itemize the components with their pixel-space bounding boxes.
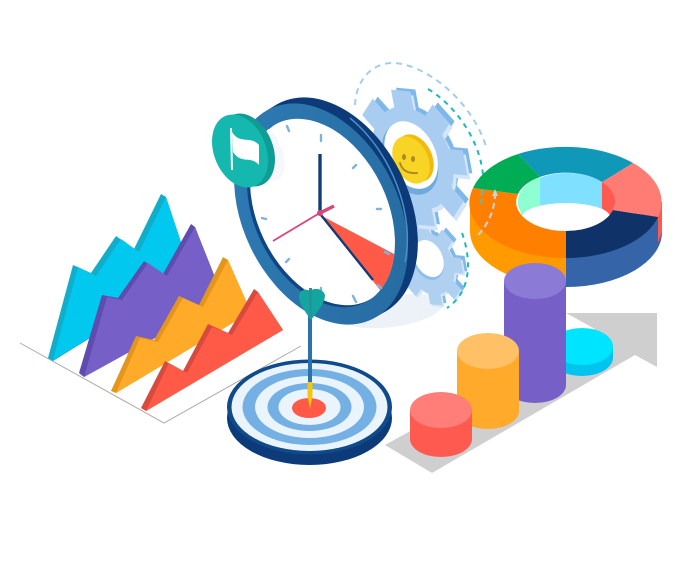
icon: large gear with smiley xyxy=(339,71,492,247)
red wedge xyxy=(324,217,394,290)
cylinder: orange xyxy=(457,333,519,429)
donut side: orange xyxy=(470,202,566,286)
second hand xyxy=(273,206,334,241)
dashed orbit: light blue xyxy=(355,63,487,150)
segment: teal xyxy=(518,147,633,182)
series: purple xyxy=(79,224,224,377)
target board xyxy=(227,360,392,465)
dart arrow xyxy=(299,288,325,409)
illustration: isometric business infographic xyxy=(20,62,662,473)
cylinder: red xyxy=(410,392,472,457)
segment: coral xyxy=(602,163,662,217)
cylinder: purple xyxy=(504,263,566,403)
dashed orbit: teal lower xyxy=(447,233,468,308)
donut inner wall xyxy=(518,173,616,231)
minute hand xyxy=(318,154,322,214)
clock ground shadow xyxy=(330,294,445,328)
clock xyxy=(234,97,418,325)
segment: navy xyxy=(566,210,658,258)
dashed orbit over donut xyxy=(477,189,498,236)
hour hand xyxy=(321,215,373,280)
icon: small gear xyxy=(382,208,480,318)
clock front ring xyxy=(200,75,442,353)
series: orange xyxy=(111,257,251,393)
axis lines xyxy=(20,343,301,423)
ring highlight xyxy=(350,118,407,262)
clock back rim xyxy=(205,69,452,350)
chart: mountain area series xyxy=(20,194,301,423)
flag xyxy=(230,128,259,170)
cylinder: cyan xyxy=(551,328,613,376)
donut side: coral sliver xyxy=(658,202,662,243)
segment: green xyxy=(473,154,540,194)
growth arrow base xyxy=(385,313,657,473)
donut side: blue xyxy=(566,202,662,287)
series: cyan xyxy=(48,194,192,361)
badge shadow on face xyxy=(266,128,284,180)
icon: smiley face xyxy=(385,128,441,190)
icon: flag badge xyxy=(202,105,285,196)
donut chart xyxy=(469,147,662,287)
series: red xyxy=(141,289,283,411)
segment: orange xyxy=(469,188,566,258)
donut hole xyxy=(522,203,610,231)
dashed orbit: teal upper xyxy=(428,89,483,175)
clock face xyxy=(250,118,395,306)
clock ticks xyxy=(262,126,389,302)
clock inner wall xyxy=(218,94,424,332)
